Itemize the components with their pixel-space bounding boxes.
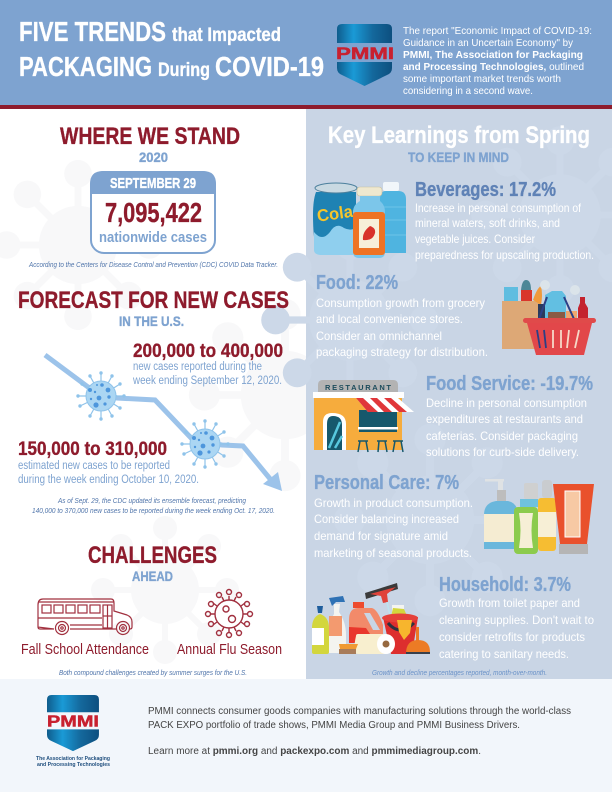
panel: footer background [0,679,612,792]
text block: household: Household: 3.7% [439,574,571,596]
panel: where we stand [28,123,278,269]
text block: food: Consider an omnichannel [316,329,442,343]
title: During [158,60,210,81]
panel: header banner [0,0,612,109]
panel: right background [306,109,612,679]
panel: footer [36,695,571,768]
callout: case count card: SEPTEMBER 29 [110,175,196,192]
text block: report intro: and Processing Technologies, outlined [403,61,584,73]
subheading: 2020: 2020 [139,150,168,165]
faint background viruses, right [261,126,612,616]
text block: household: Growth from toilet paper and [439,596,580,610]
subheading: in the U.S.: IN THE U.S. [119,314,184,329]
text block: report intro: considering in a second wave. [403,85,533,97]
text block: food: Consumption growth from grocery [316,296,485,310]
text block: report intro: Guidance in an Uncertain Economy" by [403,37,574,49]
icon: PMMI footer logo: PMMI [47,714,99,731]
icon: flu virus [206,590,252,638]
text block: beverages: Beverages: 17.2% [415,179,556,201]
icon: beverages: Cola [316,202,355,226]
text block: personal care: demand for signature amid [314,529,448,543]
text block: personal care: marketing of seasonal products. [314,546,472,560]
callout: case count card [90,171,216,253]
text block: household: cleaning supplies. Don't wait to [439,613,594,627]
challenges note: Both compound challenges created by summer surges for the U.S. [59,670,247,677]
heading: forecast: FORECAST FOR NEW CASES [18,287,289,314]
text block: household: catering to sanitary needs. [439,647,569,661]
text block: household [439,574,594,661]
heading: where we stand: WHERE WE STAND [60,123,240,150]
subheading: to keep in mind: TO KEEP IN MIND [408,150,509,165]
icon: personal care bottles [484,479,594,554]
text block: October figure: 150,000 to 310,000 [18,438,167,460]
forecast note: As of Sept. 29, the CDC updated its ensemble forecast, predicting [57,498,246,505]
text block: about PMMI: PACK EXPO portfolio of trade shows, PMMI Media Group and PMMI Business Drivers. [148,720,520,731]
subheading: ahead: AHEAD [132,569,173,584]
text block: about PMMI: Learn more at pmmi.org and packexpo.com and pmmimediagroup.com. [148,746,481,757]
text block: beverages: vegetable juices. Consider [415,232,535,246]
icon: grocery basket [502,280,596,355]
icon: beverages [313,182,406,258]
text block: food service: cafeterias. Consider packaging [426,429,578,443]
text block: food: and local convenience stores. [316,312,463,326]
icon: PMMI footer logo [36,695,110,768]
panel: challenges [21,542,282,677]
text block: report intro: PMMI, The Association for Packaging [403,49,583,61]
text block: October figure [18,438,199,486]
text block: September figure: week ending September 12, 2020. [132,375,282,387]
icon: PMMI logo [336,24,394,86]
title: FIVE TRENDS [19,16,166,47]
icon: cleaning supplies [312,583,430,654]
faint background viruses, left [0,160,381,664]
text block: beverages: Increase in personal consumption of [415,201,582,215]
text block: report intro: The report "Economic Impact of COVID-19: [403,25,592,37]
title: COVID-19 [215,51,324,82]
icon: restaurant [313,380,414,452]
text block: October figure: during the week ending October 10, 2020. [18,474,199,486]
callout: case count card: nationwide cases [99,230,207,246]
text block: about PMMI [148,706,571,757]
callout: case count card: 7,095,422 [105,197,202,228]
text block: food service [426,373,593,459]
text block: report intro: some important market trends worth [403,73,561,85]
panel: forecast [18,287,289,515]
text block: food: packaging strategy for distribution. [316,345,488,359]
text block: report intro [403,25,592,97]
text block: September figure: new cases reported during the [133,361,262,373]
icon: restaurant: RESTAURANT [325,383,391,392]
text block: personal care [314,472,473,560]
label: fall school attendance: Fall School Attendance [21,641,149,658]
forecast note [32,498,275,515]
heading: challenges: CHALLENGES [88,542,217,569]
source note: According to the Centers for Disease Control and Prevention (CDC) COVID Data Tracker. [28,262,278,269]
icon: PMMI footer logo: and Processing Technologies [37,762,110,768]
text block: personal care: Personal Care: 7% [314,472,459,494]
forecast note: 140,000 to 370,000 new cases to be reported during the week ending Oct. 17, 2020. [32,508,275,515]
text block: household: consider retrofits for products [439,630,585,644]
text block: food: Food: 22% [316,272,398,294]
text block: October figure: estimated new cases to be reported [18,460,170,472]
text block: personal care: Consider balancing increased [314,512,459,526]
growth note: Growth and decline percentages reported, month-over-month. [372,670,547,677]
text block: September figure [132,340,283,387]
title: PACKAGING [19,51,152,82]
text block: food service: Decline in personal consumption [426,396,587,410]
title: that Impacted [172,25,281,46]
icon: PMMI footer logo: The Association for Packaging [36,756,110,762]
text block: food service: solutions for curb-side delivery. [426,445,579,459]
title [19,16,324,82]
text block: September figure: 200,000 to 400,000 [133,340,283,362]
text block: beverages [415,179,594,262]
text block: food [316,272,488,359]
icon: school bus [38,599,132,634]
icon: virus two [180,419,230,469]
text block: beverages: mineral waters, soft drinks, and [415,216,560,230]
label: annual flu season: Annual Flu Season [177,641,282,658]
icon: PMMI logo: PMMI [336,44,394,63]
chart: declining arrow [45,355,282,491]
text block: food service: expenditures at restaurants and [426,412,583,426]
icon: virus one [76,371,126,421]
text block: personal care: Growth in product consumption. [314,496,473,510]
panel: key learnings [312,122,596,677]
text block: about PMMI: PMMI connects consumer goods companies with manufacturing solutions through the world-class [148,706,571,717]
